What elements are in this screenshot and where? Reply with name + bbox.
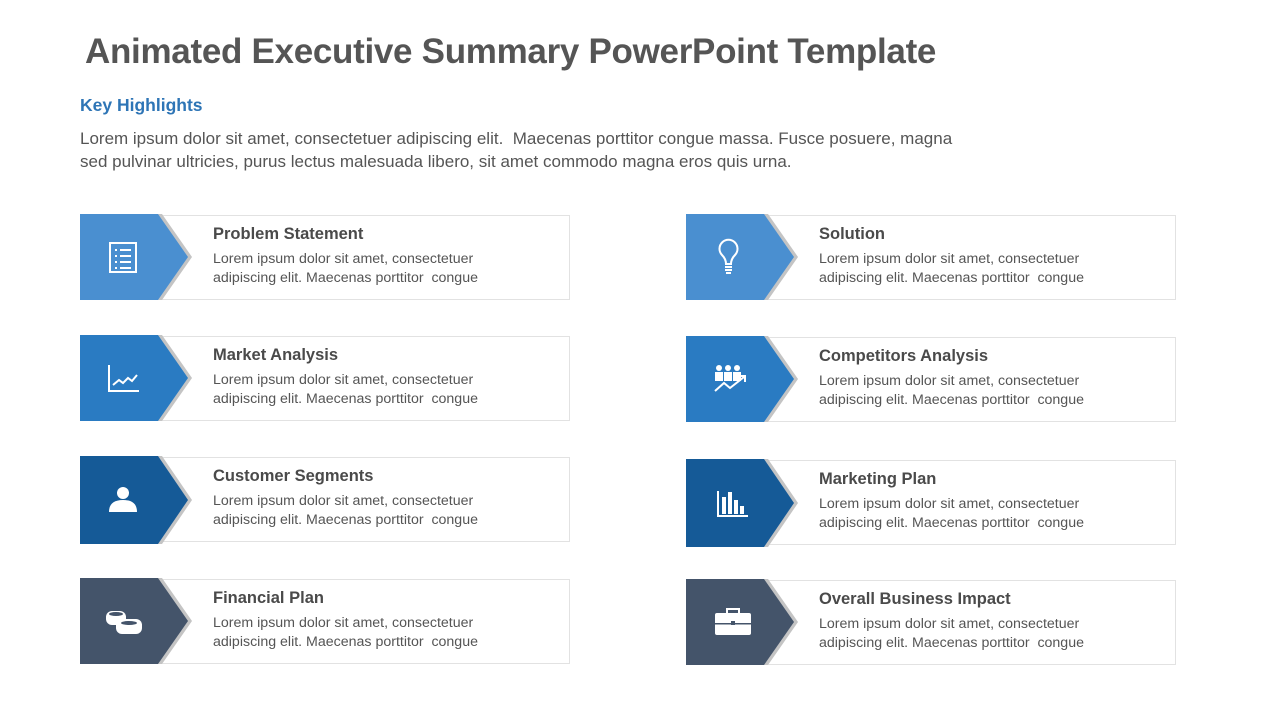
card: competitors analysis: Competitors Analysis bbox=[819, 347, 988, 365]
card: customer segments: Customer Segments bbox=[213, 467, 373, 485]
card: competitors analysis bbox=[686, 336, 1176, 422]
card: overall business impact: Overall Business Impact bbox=[819, 590, 1011, 608]
card: problem statement: Problem Statement bbox=[213, 225, 363, 243]
card: solution: adipiscing elit. Maecenas porttitor congue bbox=[819, 270, 1084, 286]
card: market analysis: Market Analysis bbox=[213, 346, 338, 364]
card: competitors analysis: Lorem ipsum dolor sit amet, consectetuer bbox=[819, 373, 1079, 389]
card: market analysis: Lorem ipsum dolor sit amet, consectetuer bbox=[213, 372, 473, 388]
intro text: sed pulvinar ultricies, purus lectus malesuada libero, sit amet commodo magna eros quis urna. bbox=[80, 152, 792, 171]
card: problem statement bbox=[80, 214, 570, 300]
card: solution: Lorem ipsum dolor sit amet, consectetuer bbox=[819, 251, 1079, 267]
card: financial plan: Lorem ipsum dolor sit amet, consectetuer bbox=[213, 615, 473, 631]
card: solution: Solution bbox=[819, 225, 885, 243]
card: financial plan: adipiscing elit. Maecenas porttitor congue bbox=[213, 634, 478, 650]
card: marketing plan: adipiscing elit. Maecenas porttitor congue bbox=[819, 515, 1084, 531]
card: overall business impact: adipiscing elit. Maecenas porttitor congue bbox=[819, 635, 1084, 651]
card: overall business impact: Lorem ipsum dolor sit amet, consectetuer bbox=[819, 616, 1079, 632]
card: customer segments: adipiscing elit. Maecenas porttitor congue bbox=[213, 512, 478, 528]
card: financial plan: Financial Plan bbox=[213, 589, 324, 607]
card: financial plan bbox=[80, 578, 570, 664]
heading: key highlights: Key Highlights bbox=[80, 95, 203, 115]
card: customer segments: Lorem ipsum dolor sit amet, consectetuer bbox=[213, 493, 473, 509]
card: overall business impact bbox=[686, 579, 1176, 665]
card: solution bbox=[686, 214, 1176, 300]
card: competitors analysis: adipiscing elit. Maecenas porttitor congue bbox=[819, 392, 1084, 408]
card: problem statement: adipiscing elit. Maecenas porttitor congue bbox=[213, 270, 478, 286]
card: marketing plan: Lorem ipsum dolor sit amet, consectetuer bbox=[819, 496, 1079, 512]
intro text: Lorem ipsum dolor sit amet, consectetuer adipiscing elit. Maecenas porttitor congue massa. Fusce posuere, magna bbox=[80, 129, 952, 148]
card: marketing plan bbox=[686, 459, 1176, 547]
card: problem statement: Lorem ipsum dolor sit amet, consectetuer bbox=[213, 251, 473, 267]
card: market analysis bbox=[80, 335, 570, 421]
card: market analysis: adipiscing elit. Maecenas porttitor congue bbox=[213, 391, 478, 407]
intro text bbox=[80, 129, 952, 171]
title: Animated Executive Summary PowerPoint Template bbox=[85, 32, 936, 71]
card: customer segments bbox=[80, 456, 570, 544]
card: marketing plan: Marketing Plan bbox=[819, 470, 936, 488]
